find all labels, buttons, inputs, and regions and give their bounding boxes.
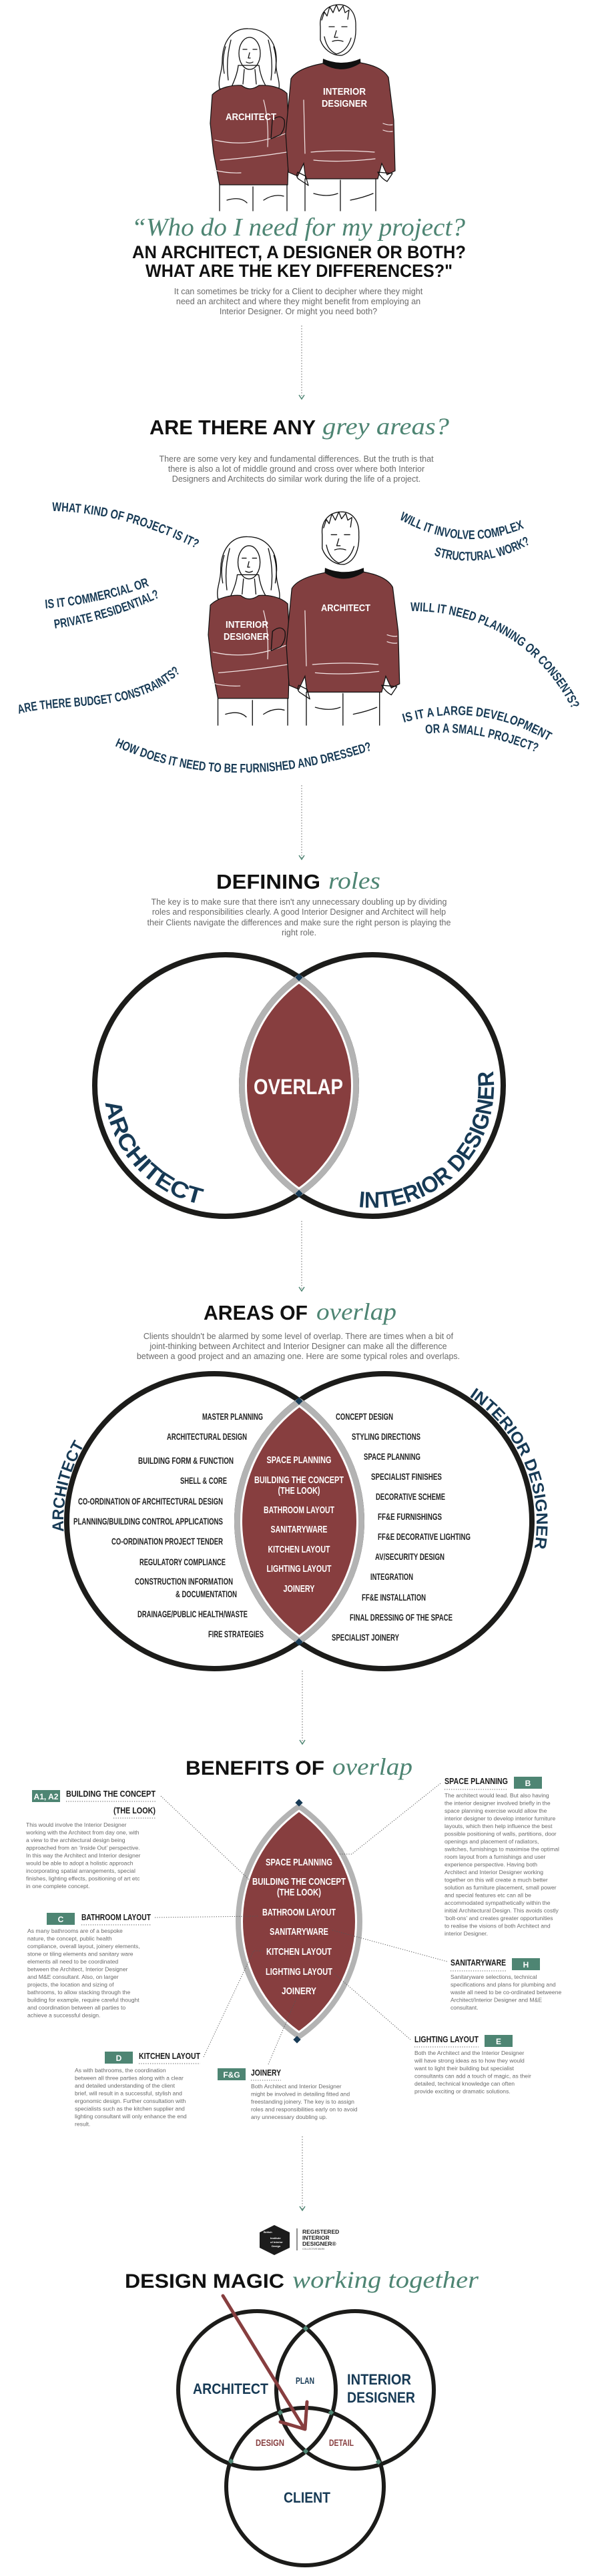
label: client: CLIENT — [284, 2489, 330, 2506]
heading: defining roles: roles — [328, 867, 380, 894]
callout: building the concept: working with the Architect from day one, with — [25, 1829, 139, 1836]
interior designer roles list: SPACE PLANNING — [364, 1451, 420, 1462]
overlap roles list — [254, 1454, 344, 1595]
overlap roles list: (THE LOOK) — [278, 1485, 320, 1496]
heading: grey areas — [150, 413, 449, 440]
question: size: OR A SMALL PROJECT? — [426, 723, 539, 751]
overlap roles list: KITCHEN LAYOUT — [268, 1544, 330, 1555]
heading: design magic — [125, 2266, 479, 2293]
heading: defining roles — [216, 867, 380, 894]
heading: grey areas: ARE THERE ANY — [150, 416, 316, 439]
curved questions — [19, 502, 579, 773]
sweater label: interior designer: INTERIOR — [323, 86, 366, 97]
heading: benefits of overlap — [186, 1753, 412, 1780]
defining roles paragraph: roles and responsibilities clearly. A good Interior Designer and Architect will help — [152, 907, 446, 917]
architect roles list: DRAINAGE/PUBLIC HEALTH/WASTE — [137, 1609, 248, 1619]
sweater label: architect: ARCHITECT — [321, 602, 370, 614]
overlap roles list: LIGHTING LAYOUT — [267, 1563, 331, 1575]
callout: bathroom layout — [27, 1912, 259, 2019]
callout: space planning: initial Architectural Design. This avoids costly — [444, 1907, 559, 1913]
interior designer roles list: INTEGRATION — [370, 1571, 413, 1582]
label: interior designer: INTERIOR — [347, 2371, 411, 2388]
callout: building the concept: (THE LOOK) — [113, 1805, 156, 1815]
callout: building the concept: finishes, lighting effects, positioning of art etc — [26, 1875, 140, 1881]
areas of overlap paragraph: joint-thinking between Architect and Interior Designer can make all the difference — [149, 1342, 447, 1351]
architect roles list: ARCHITECTURAL DESIGN — [167, 1431, 247, 1442]
heading: design magic: working together — [292, 2266, 479, 2293]
architect roles list: PLANNING/BUILDING CONTROL APPLICATIONS — [73, 1516, 223, 1527]
sweater label: interior designer — [224, 619, 269, 642]
architect roles list — [73, 1411, 264, 1639]
callout: space planning: solution as furniture placement, small power — [444, 1884, 557, 1891]
callout: lighting layout: LIGHTING LAYOUT — [414, 2034, 479, 2044]
grey areas paragraph: Designers and Architects do similar work during the life of a project. — [172, 474, 420, 484]
question: commercial or residential — [45, 578, 158, 628]
arrow: down 5 — [300, 2136, 305, 2210]
label: interior designer: INTERIOR DESIGNER — [360, 1071, 494, 1208]
main title: WHAT ARE THE KEY DIFFERENCES?" — [145, 261, 453, 281]
question: project kind: WHAT KIND OF PROJECT IS IT? — [52, 502, 199, 547]
lens items — [252, 1857, 346, 1997]
heading: areas of overlap: overlap — [316, 1298, 396, 1325]
label: architect: ARCHITECT — [105, 1103, 204, 1203]
label: detail: DETAIL — [329, 2437, 354, 2448]
heading: defining roles: DEFINING — [216, 870, 320, 893]
logo: BIID registered interior designer — [260, 2225, 339, 2255]
label: interior designer — [347, 2371, 415, 2406]
arrow: down 2 — [299, 785, 304, 859]
callout: kitchen layout: between all three parties along with a clear — [75, 2075, 184, 2082]
callout: sanitaryware: consultant. — [451, 2004, 479, 2011]
callout: bathroom layout: As many bathrooms are of a bespoke — [27, 1927, 123, 1934]
lens items: JOINERY — [282, 1986, 316, 1997]
main title — [132, 242, 466, 281]
callout: space planning: possible positioning of walls, partitions, door — [444, 1831, 557, 1837]
question: furnished: HOW DOES IT NEED TO BE FURNISHED AND DRESSED? — [115, 738, 370, 773]
callout: space planning: layouts, which then help influence the best — [444, 1823, 553, 1829]
sweater label: interior designer: DESIGNER — [224, 631, 269, 642]
logo: BIID registered interior designer: of Interior — [270, 2240, 283, 2244]
callout: joinery: Both Architect and Interior Designer — [251, 2083, 342, 2090]
callout: bathroom layout: compliance, overall layout, joinery elements, — [27, 1943, 140, 1950]
illustration: architect and interior designer (top) — [210, 5, 395, 211]
heading: areas of overlap — [204, 1298, 396, 1325]
callout: kitchen layout: D — [116, 2054, 122, 2063]
logo: BIID registered interior designer: DESIGNER® — [302, 2240, 336, 2247]
callout: joinery: might be involved in detailing fitted and — [251, 2091, 350, 2098]
heading: design magic: DESIGN MAGIC — [125, 2270, 284, 2292]
callout: building the concept: approached from an ‘Inside Out’ perspective. — [26, 1844, 140, 1851]
label: plan: PLAN — [296, 2375, 314, 2386]
interior designer roles list: FINAL DRESSING OF THE SPACE — [350, 1612, 453, 1623]
question: size: IS IT A LARGE DEVELOPMENT — [402, 706, 553, 740]
logo: BIID registered interior designer: INTERIOR — [302, 2234, 330, 2241]
logo: BIID registered interior designer: COLLECTIVE MARK — [302, 2248, 325, 2250]
illustration: interior designer and architect (swapped) — [208, 512, 400, 725]
interior designer roles list: FF&E INSTALLATION — [362, 1592, 426, 1603]
callout: building the concept: This would involve the Interior Designer — [26, 1821, 127, 1828]
callout: joinery: F&G — [223, 2070, 240, 2080]
callout: kitchen layout: KITCHEN LAYOUT — [139, 2051, 200, 2061]
architect roles list: CO-ORDINATION OF ARCHITECTURAL DESIGN — [78, 1496, 223, 1507]
callout: kitchen layout: ergonomic design. Further consultation with — [75, 2098, 186, 2104]
venn: design magic — [178, 2296, 434, 2565]
interior designer roles list — [332, 1411, 471, 1643]
intro paragraph: It can sometimes be tricky for a Client to decipher where they might — [174, 287, 423, 296]
callout: space planning: and special features etc can all be — [444, 1892, 531, 1899]
callout: building the concept: incorporating spatial arrangements, special — [26, 1867, 135, 1874]
intro paragraph — [174, 287, 423, 316]
callout: bathroom layout: building for example, require careful thought — [27, 1996, 139, 2003]
callout: bathroom layout: bathrooms, to allow stacking through the — [27, 1989, 131, 1996]
architect roles list: MASTER PLANNING — [202, 1411, 263, 1422]
question: commercial or residential: IS IT COMMERCIAL OR — [45, 578, 150, 608]
interior designer roles list: FF&E FURNISHINGS — [378, 1511, 442, 1522]
callout: space planning: openings and placement of radiators, — [444, 1838, 539, 1845]
overlap roles list: BATHROOM LAYOUT — [264, 1505, 334, 1516]
callout: space planning: to realise the visions of both Architect and — [444, 1923, 551, 1929]
label: architect: ARCHITECT — [52, 1440, 83, 1532]
callout: building the concept: A1, A2 — [34, 1792, 59, 1801]
lens items: SANITARYWARE — [270, 1926, 328, 1938]
interior designer roles list: CONCEPT DESIGN — [336, 1411, 393, 1422]
callout: bathroom layout: and coordination between all parties to — [27, 2004, 125, 2011]
lens items: KITCHEN LAYOUT — [266, 1946, 332, 1958]
grey areas paragraph: There are some very key and fundamental differences. But the truth is that — [159, 454, 434, 464]
callout: kitchen layout: brief, will result in a successful, stylish and — [75, 2090, 182, 2096]
callout: space planning: The architect would lead. But also having — [444, 1792, 549, 1799]
callout: sanitaryware: specifications and plans for plumbing and — [451, 1982, 556, 1988]
callout: space planning: the interior designer involved briefly in the — [444, 1800, 551, 1807]
callout: lighting layout: provide exciting or dramatic solutions. — [414, 2088, 511, 2095]
callout: building the concept: In this way the Architect and Interior designer — [26, 1852, 141, 1859]
architect roles list: FIRE STRATEGIES — [208, 1629, 264, 1639]
callout: lighting layout: consultants can add a touch of magic, as their — [414, 2072, 531, 2079]
lens items: LIGHTING LAYOUT — [266, 1966, 332, 1978]
callout: space planning: Architect and Interior Designer working — [444, 1869, 543, 1875]
intro paragraph: need an architect and where they might benefit from employing an — [176, 297, 420, 306]
logo: BIID registered interior designer: Institute — [270, 2236, 281, 2240]
callout: space planning: ‘bolt-ons’ and creates greater opportunities — [444, 1915, 553, 1921]
quote heading: “Who do I need for my project? — [131, 213, 465, 242]
callout: building the concept: BUILDING THE CONCEPT — [66, 1789, 156, 1799]
callout: space planning: together on this will create a much better — [444, 1876, 548, 1883]
overlap roles list: SPACE PLANNING — [267, 1454, 331, 1466]
callout: space planning: room layout from a furnishings and user — [444, 1853, 546, 1860]
callout: bathroom layout: BATHROOM LAYOUT — [81, 1912, 151, 1922]
architect roles list: REGULATORY COMPLIANCE — [139, 1557, 226, 1567]
heading: benefits of overlap: overlap — [332, 1753, 412, 1780]
architect roles list: CO-ORDINATION PROJECT TENDER — [111, 1536, 223, 1547]
callout: building the concept: would be able to adopt a holistic approach — [25, 1860, 133, 1867]
architect roles list: & DOCUMENTATION — [176, 1589, 237, 1599]
interior designer roles list: FF&E DECORATIVE LIGHTING — [378, 1531, 471, 1542]
callout: bathroom layout: and M&E consultant. Also, on larger — [27, 1974, 119, 1980]
venn: defining roles — [92, 952, 506, 1219]
callout: building the concept: in one complete concept. — [26, 1883, 90, 1889]
callout: joinery: freestanding joinery. The key is to assign — [251, 2098, 354, 2105]
callout: joinery: JOINERY — [251, 2068, 281, 2078]
label: interior designer: INTERIOR DESIGNER — [470, 1388, 548, 1549]
callout: space planning: space planning exercise would allow the — [444, 1807, 547, 1814]
label: interior designer: DESIGNER — [347, 2389, 415, 2406]
logo: BIID registered interior designer: REGISTERED — [302, 2228, 339, 2235]
callout: space planning: interior Designer. — [444, 1930, 488, 1937]
logo: BIID registered interior designer: Design — [272, 2244, 281, 2248]
callout: bathroom layout: C — [58, 1915, 64, 1924]
callout: kitchen layout: and detailed understanding of the client — [75, 2082, 176, 2089]
callout: lighting layout: detailed, technical knowledge can often — [414, 2080, 515, 2087]
overlap roles list: JOINERY — [283, 1583, 315, 1595]
question: structural: STRUCTURAL WORK? — [434, 536, 529, 560]
callout: joinery: roles and responsibilities early on to avoid — [251, 2106, 358, 2112]
defining roles paragraph — [147, 897, 451, 937]
callout: sanitaryware: Architect/Interior Designer and M&E — [451, 1996, 542, 2003]
callout: sanitaryware: SANITARYWARE — [451, 1958, 506, 1968]
callout: kitchen layout: lighting consultant will only enhance the end — [75, 2113, 187, 2120]
callout: bathroom layout: projects, the location and sizing of — [27, 1982, 114, 1988]
interior designer roles list: STYLING DIRECTIONS — [352, 1431, 420, 1442]
architect roles list: BUILDING FORM & FUNCTION — [138, 1455, 234, 1466]
venn: areas of overlap — [52, 1371, 548, 1671]
logo: BIID registered interior designer: British — [264, 2230, 272, 2234]
grey areas paragraph: there is also a lot of middle ground and cross over where both Interior — [168, 464, 424, 474]
lens items: SPACE PLANNING — [266, 1857, 332, 1868]
callout: sanitaryware: H — [523, 1960, 529, 1970]
callout: lighting layout: want to light their building but specialist — [414, 2065, 515, 2072]
callout: joinery: any unnecessary doubling up. — [251, 2114, 327, 2120]
main title: AN ARCHITECT, A DESIGNER OR BOTH? — [132, 242, 466, 262]
callout: space planning: experience perspective. Having both — [444, 1861, 537, 1868]
areas of overlap paragraph: between a good project and an amazing one. Here are some typical roles and overlaps. — [137, 1352, 460, 1361]
arrow: down 4 — [300, 1671, 305, 1744]
question: structural: WILL IT INVOLVE COMPLEX — [400, 511, 525, 539]
callout: lighting layout — [331, 1971, 531, 2095]
intro paragraph: Interior Designer. Or might you need both? — [220, 307, 377, 316]
lens items: BATHROOM LAYOUT — [262, 1907, 336, 1918]
callout: lighting layout: E — [496, 2037, 501, 2046]
heading: grey areas: grey areas? — [322, 413, 449, 440]
heading: areas of overlap: AREAS OF — [204, 1301, 308, 1324]
overlap roles list: SANITARYWARE — [271, 1524, 327, 1535]
architect roles list: CONSTRUCTION INFORMATION — [135, 1576, 233, 1587]
heading: benefits of overlap: BENEFITS OF — [186, 1757, 324, 1779]
callout: space planning — [339, 1776, 559, 1937]
sweater label: interior designer — [322, 86, 367, 109]
interior designer roles list: DECORATIVE SCHEME — [376, 1491, 445, 1502]
question: budget: ARE THERE BUDGET CONSTRAINTS? — [19, 667, 179, 714]
interior designer roles list: AV/SECURITY DESIGN — [375, 1551, 444, 1562]
label: design: DESIGN — [256, 2437, 284, 2448]
callout: joinery — [218, 1997, 358, 2120]
callout: bathroom layout: achieve a successful design. — [27, 2012, 100, 2019]
lens items: (THE LOOK) — [277, 1887, 321, 1898]
callout: kitchen layout: specialists such as the kitchen supplier and — [75, 2106, 185, 2112]
callout: kitchen layout: As with bathrooms, the coordination — [75, 2067, 166, 2074]
callout: kitchen layout: result. — [75, 2120, 90, 2127]
areas of overlap paragraph — [137, 1332, 460, 1361]
defining roles paragraph: The key is to make sure that there isn't any unnecessary doubling up by dividing — [152, 897, 447, 907]
question: planning: WILL IT NEED PLANNING OR CONSENTS? — [410, 602, 579, 707]
overlap roles list: BUILDING THE CONCEPT — [254, 1474, 344, 1486]
callout: kitchen layout — [75, 1951, 262, 2127]
callout: lighting layout: will have strong ideas as to how they would — [414, 2058, 525, 2064]
overlap lens — [247, 983, 351, 1188]
label: architect: ARCHITECT — [193, 2381, 268, 2397]
callout: bathroom layout: nature, the concept, public health — [27, 1935, 112, 1942]
question: structural — [400, 511, 529, 560]
callout: bathroom layout: between the Architect, Interior Designer — [27, 1966, 128, 1972]
callout: space planning: interior designer to develop interior furniture — [444, 1815, 555, 1821]
callout: bathroom layout: elements all need to be coordinated — [27, 1958, 118, 1965]
arrow: design magic pointer — [223, 2296, 307, 2429]
sweater label: interior designer: DESIGNER — [322, 98, 367, 109]
callout: space planning: SPACE PLANNING — [444, 1776, 508, 1786]
callout: lighting layout: Both the Architect and the Interior Designer — [414, 2050, 524, 2056]
callout: space planning: B — [525, 1779, 531, 1788]
callout: space planning: switches, furnishings to maximise the optimal — [444, 1845, 559, 1852]
callout: building the concept — [25, 1789, 250, 1889]
arrow: down 3 — [299, 1221, 304, 1291]
callout: sanitaryware — [332, 1930, 561, 2011]
benefits lens — [236, 1799, 362, 2043]
defining roles paragraph: their Clients navigate the differences and make sure the right person is playing the — [147, 918, 451, 927]
callout: space planning: accommodated sympathetically within the — [444, 1899, 551, 1906]
callout: sanitaryware: waste all need to be co-ordinated betweene — [450, 1989, 561, 1996]
question: commercial or residential: PRIVATE RESIDENTIAL? — [54, 590, 158, 628]
callout: building the concept: a view to the architectural design being — [26, 1837, 125, 1843]
architect roles list: SHELL & CORE — [180, 1475, 227, 1486]
sweater label: interior designer: INTERIOR — [226, 619, 268, 630]
interior designer roles list: SPECIALIST JOINERY — [332, 1632, 399, 1643]
lens items: BUILDING THE CONCEPT — [252, 1876, 346, 1887]
grey areas paragraph — [159, 454, 434, 484]
overlap lens: OVERLAP — [254, 1075, 343, 1099]
callout: bathroom layout: stone or tiling elements and sanitary ware — [27, 1951, 133, 1958]
areas of overlap paragraph: Clients shouldn't be alarmed by some level of overlap. There are times when a bit of — [143, 1332, 454, 1341]
callout: sanitaryware: Sanitaryware selections, technical — [451, 1974, 537, 1980]
sweater label: architect: ARCHITECT — [226, 111, 276, 123]
arrow: down 1 — [299, 326, 304, 399]
interior designer roles list: SPECIALIST FINISHES — [371, 1471, 442, 1482]
defining roles paragraph: right role. — [282, 928, 316, 937]
